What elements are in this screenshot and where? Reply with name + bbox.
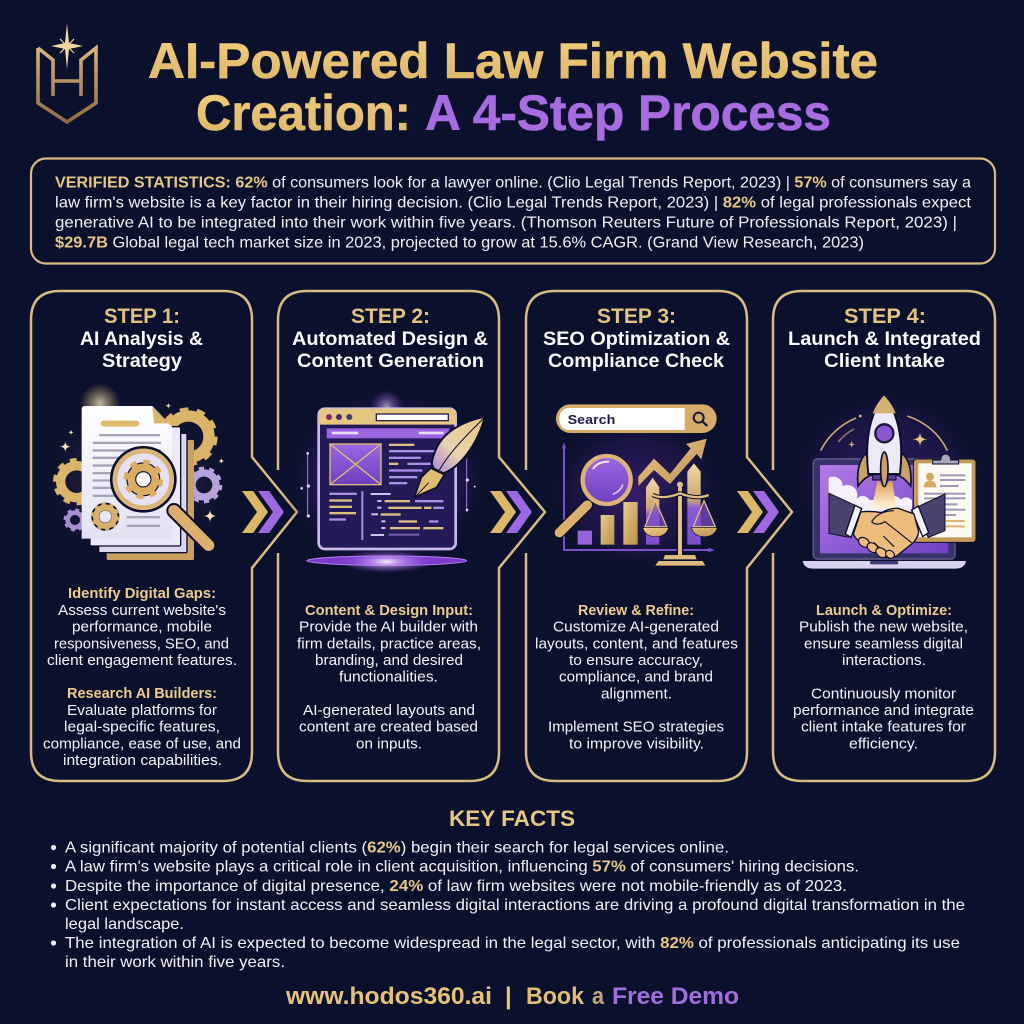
step 3 heading: SEO Optimization & [543,329,730,350]
step 2 text: content are created based [299,719,478,736]
key facts heading: KEY FACTS [449,806,575,831]
step 1 heading [80,305,203,372]
step 3 text: Implement SEO strategies [548,719,724,736]
logo: shield H with star [38,23,96,122]
key facts list: legal landscape. [65,916,184,933]
panel: verified statistics [31,158,995,264]
step 3 text [535,602,738,752]
step 1 heading: Strategy [102,351,182,372]
step 2 heading [292,305,488,372]
step 3 heading [543,305,730,372]
step 1 heading: AI Analysis & [80,329,203,350]
step 2 text: Content & Design Input: [305,602,473,619]
step 4 text: ensure seamless digital [804,635,963,652]
footer call to action: | [505,983,512,1010]
step 4 heading: STEP 4: [844,305,926,328]
step 3 heading: STEP 3: [597,305,676,328]
step 1 text: client engagement features. [47,652,237,669]
arrow: step 1 to step 2 [242,491,284,533]
title: AI-Powered Law Firm Website [148,33,878,89]
step 2 text: firm details, practice areas, [297,635,481,652]
step 1 heading: STEP 1: [104,305,180,328]
key facts list: Client expectations for instant access and seamless digital interactions are driving a profound digital transformation in the [65,897,965,914]
step 2 text: on inputs. [356,735,422,752]
panel: verified statistics: $29.7B Global legal tech market size in 2023, projected to grow at 15.6% CAGR. (Grand View Research, 2023) [55,234,864,252]
key facts list: Despite the importance of digital presence, 24% of law firm websites were not mobile-friendly as of 2023. [65,878,847,895]
step 4 text: Continuously monitor [811,685,956,702]
panel: step 1 [31,291,297,781]
title: A 4-Step Process [425,85,831,141]
step 4 text: efficiency. [849,735,918,752]
icon: search bar, growth chart, magnifier and scales: Search [568,413,615,427]
title [148,33,878,141]
step 2 heading: STEP 2: [351,305,430,328]
step 2 text [297,602,481,752]
step 2 text: functionalities. [339,669,438,686]
step 4 heading [788,305,981,372]
step 2 heading: Automated Design & [292,329,488,350]
step 1 text: Evaluate platforms for [67,702,217,719]
step 1 text: compliance, ease of use, and [43,735,241,752]
arrow: step 2 to step 3 [490,491,532,533]
title: Creation: [196,85,411,141]
step 1 text: legal-specific features, [64,719,220,736]
step 1 text: integration capabilities. [63,752,222,769]
footer call to action: www.hodos360.ai [285,983,492,1010]
icon: search bar, growth chart, magnifier and scales [540,404,733,577]
footer call to action: Book [526,983,585,1010]
arrow: step 3 to step 4 [737,491,779,533]
footer call to action: Free Demo [612,983,739,1010]
icon: document with gears and magnifier [33,383,240,573]
step 1 text: Identify Digital Gaps: [68,585,216,602]
step 3 text: alignment. [601,685,672,702]
panel: step 4 [773,291,995,781]
step 4 heading: Launch & Integrated [788,329,981,350]
key facts list: A significant majority of potential clients ( 62%) begin their search for legal services online. [65,840,729,856]
step 4 text: Launch & Optimize: [816,602,952,619]
footer call to action [285,983,739,1010]
step 4 text: Publish the new website, [799,619,968,636]
step 1 text [43,585,241,769]
step 1 text: responsiveness, SEO, and [54,635,229,652]
panel: verified statistics: generative AI to be integrated into their work within five years. (Thomson Reuters Future of Professionals Report, 2023) | [55,214,957,232]
key facts list [51,840,965,971]
panel: verified statistics: law firm's website is a key factor in their hiring decision. (Clio Legal Trends Report, 2023) | 82% of legal professionals expect [55,194,972,212]
step 1 text: Research AI Builders: [67,685,217,702]
key facts list: in their work within five years. [65,954,285,971]
step 4 text [793,602,974,752]
step 1 text: performance, mobile [72,619,212,636]
step 1 text: Assess current website's [58,602,226,619]
panel: step 2 [278,291,545,781]
panel: verified statistics: VERIFIED STATISTICS: 62% of consumers look for a lawyer online. (Clio Legal Trends Report, 2023) | 57% of consumers say a [55,174,971,192]
footer call to action: a [592,983,605,1010]
key facts list: The integration of AI is expected to become widespread in the legal sector, with 82% of professionals anticipating its use [65,935,960,952]
step 3 text: layouts, content, and features [535,635,738,652]
step 3 heading: Compliance Check [548,351,724,372]
step 2 text: AI-generated layouts and [303,702,475,719]
step 2 heading: Content Generation [297,351,484,372]
step 3 text: to ensure accuracy, [569,652,703,669]
step 4 heading: Client Intake [824,351,945,372]
step 4 text: client intake features for [801,719,966,736]
step 3 text: Review & Refine: [578,602,694,619]
step 3 text: Customize AI-generated [553,619,719,636]
icon: rocket, laptop, handshake and clipboard [802,396,976,569]
step 2 text: Provide the AI builder with [299,619,478,636]
key facts list: A law firm's website plays a critical role in client acquisition, influencing 57% of consumers' hiring decisions. [65,858,859,876]
icon: browser window with quill [280,383,493,577]
panel: step 3 [526,291,792,781]
step 3 text: to improve visibility. [569,735,704,752]
step 4 text: interactions. [842,652,926,669]
step 4 text: performance and integrate [793,702,974,719]
step 3 text: compliance, and brand [559,669,713,686]
step 2 text: branding, and desired [315,652,463,669]
